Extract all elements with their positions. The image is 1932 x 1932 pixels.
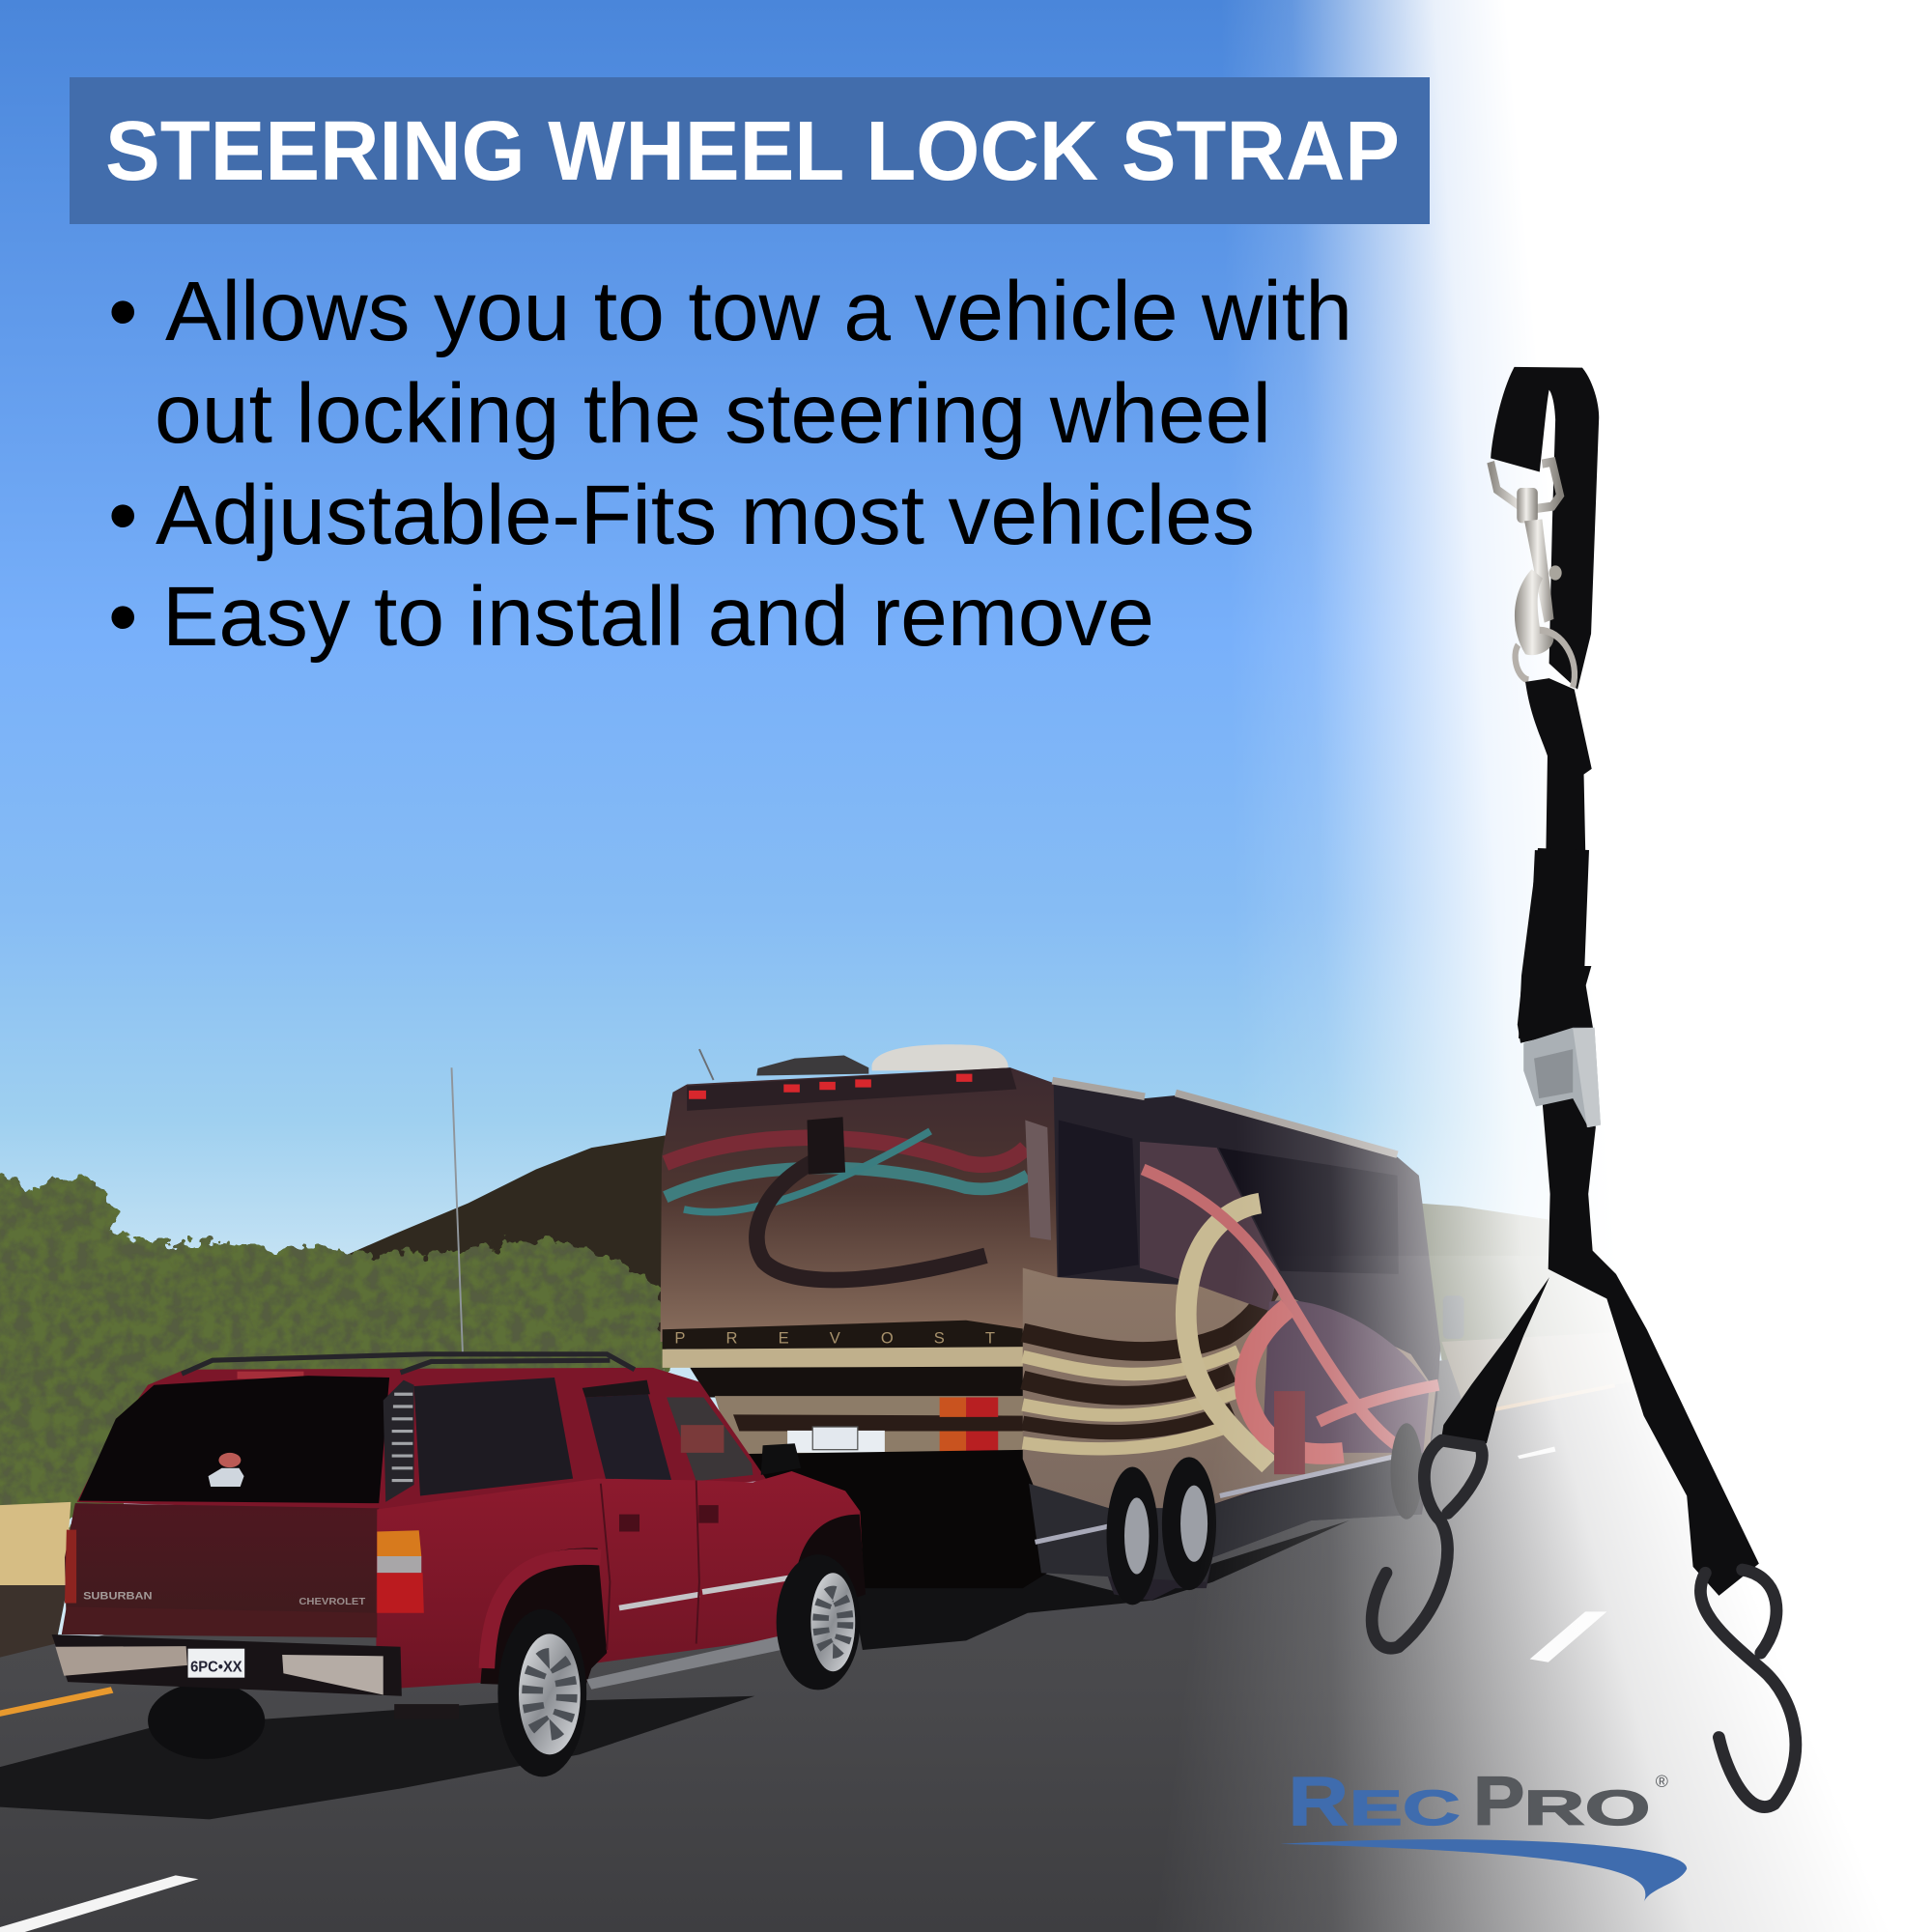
- coach antenna: [699, 1049, 714, 1080]
- bullet three: •: [108, 570, 137, 664]
- logo swoosh: [1280, 1839, 1687, 1902]
- vent slats: [392, 1394, 412, 1481]
- side swirl pink ribbon: [1143, 1169, 1438, 1446]
- white fade lower: [0, 1256, 1932, 1932]
- hatch panel: [65, 1503, 379, 1633]
- tree line: [0, 1169, 668, 1523]
- bumper: [52, 1634, 402, 1696]
- door handles: [619, 1505, 719, 1532]
- rear red lights: [966, 1397, 998, 1452]
- brand band with lettering: PREVOST: [674, 1328, 995, 1347]
- bullet one: •: [108, 265, 137, 358]
- side windows row: [1219, 1148, 1399, 1274]
- door seams: [601, 1481, 699, 1650]
- brake light: [238, 1372, 303, 1378]
- side mauve panel middle: [1140, 1142, 1278, 1311]
- product: lock strap: [1372, 367, 1796, 1807]
- rear badge SUBURBAN: SUBURBAN: [83, 1591, 153, 1603]
- top strap loop: [1491, 367, 1599, 690]
- rear rim: [519, 1634, 581, 1754]
- side body: [376, 1471, 864, 1694]
- side chrome trim: [1036, 1453, 1411, 1542]
- bullet two: •: [108, 469, 137, 562]
- side door panel: [1274, 1391, 1305, 1474]
- logo letters EC: EC: [1350, 1780, 1461, 1835]
- road marking: white dash right far: [1518, 1446, 1555, 1459]
- far rear tire: [148, 1683, 265, 1759]
- main strap with right arm: [1542, 1090, 1759, 1596]
- exhaust: [394, 1704, 459, 1719]
- RecPro logo: [1280, 1763, 1687, 1902]
- lower strap folded: [1525, 678, 1592, 856]
- road surface: [0, 1311, 1928, 1932]
- logo letter R: R: [1289, 1763, 1349, 1840]
- road marking: white dash right near: [1530, 1611, 1606, 1662]
- SUV roof and greenhouse: [77, 1368, 767, 1511]
- license plate: [188, 1649, 244, 1678]
- feature bullet list: [108, 265, 1352, 664]
- side cream waves: [1023, 1351, 1238, 1449]
- coach front wheel: [1391, 1423, 1423, 1520]
- distant hill: [345, 1135, 671, 1348]
- roof rail: [1052, 1081, 1398, 1154]
- road marking: white dash left: [0, 1875, 198, 1932]
- front tire: [777, 1554, 860, 1690]
- white fade upper: [0, 0, 1932, 1256]
- bullet one: out locking the steering wheel: [155, 367, 1271, 461]
- bumper chrome left: [55, 1646, 187, 1676]
- bumper chrome right: [282, 1655, 384, 1695]
- dark band: [690, 1367, 1028, 1397]
- SUV ground shadow: [0, 1696, 754, 1819]
- side swirl cream crescent: [1186, 1204, 1269, 1465]
- bullet one: [108, 265, 1352, 461]
- rear graphic stripes: [666, 1131, 1028, 1212]
- rear amber lights: [940, 1397, 966, 1452]
- side window first: [1059, 1120, 1139, 1277]
- plate holder: [787, 1431, 885, 1453]
- left S hook: [1372, 1440, 1482, 1648]
- side mirror: [761, 1443, 801, 1475]
- road marking: orange line left: [0, 1687, 113, 1717]
- coach license plate: [812, 1427, 858, 1450]
- wiper: [808, 1117, 845, 1175]
- side swirl pink curl: [1245, 1308, 1343, 1454]
- tail light: [377, 1530, 424, 1613]
- rear quarter window: [414, 1378, 573, 1496]
- snap latch pin: [1549, 565, 1562, 581]
- registered mark: ®: [1656, 1772, 1668, 1791]
- sleeve top: [1532, 850, 1584, 918]
- dry grass roadside: [0, 1502, 71, 1588]
- bullet two: Adjustable-Fits most vehicles: [156, 469, 1255, 562]
- antenna: [452, 1067, 463, 1354]
- rear tan panel: [715, 1396, 1028, 1456]
- tan band: [663, 1347, 1028, 1368]
- far hazy hills on right: [1417, 1204, 1651, 1360]
- roof rack: [182, 1354, 635, 1374]
- lower rear band: [62, 1606, 377, 1637]
- front rim: [810, 1573, 855, 1671]
- side tan body: [1023, 1268, 1435, 1508]
- front wheel arch: [794, 1515, 866, 1619]
- dark stripe across rear panel: [733, 1414, 1028, 1432]
- red SUV: [0, 1354, 866, 1819]
- rear tire: [497, 1609, 586, 1776]
- coach rear top band: [687, 1067, 1016, 1111]
- snap shank: [1524, 520, 1553, 623]
- rear window: [79, 1376, 389, 1503]
- left arm strap: [1441, 1277, 1549, 1443]
- right S hook: [1700, 1570, 1796, 1807]
- ring: [1516, 630, 1575, 688]
- swivel bracket: [1491, 462, 1560, 510]
- running board: [586, 1635, 787, 1690]
- rear marker lights: [689, 1074, 972, 1099]
- adjuster sleeve: [1519, 848, 1594, 1038]
- decal on rear window: [209, 1453, 244, 1487]
- gravel shoulder: [0, 1585, 68, 1660]
- side vent grille: [1025, 1120, 1051, 1240]
- side dark waves: [1023, 1280, 1275, 1396]
- window reflection: [681, 1425, 724, 1453]
- side mauve panel forward: [1263, 1300, 1430, 1453]
- coach rear wall: [661, 1067, 1060, 1342]
- coach shadow: [850, 1520, 1350, 1650]
- swivel post: [1517, 488, 1538, 523]
- right road shoulder: [1441, 1329, 1663, 1412]
- title banner: [70, 77, 1430, 224]
- logo letters RO: RO: [1523, 1780, 1651, 1835]
- photo scene: highway, SUV and motorcoach: [0, 1044, 1928, 1932]
- side vent: [384, 1380, 414, 1502]
- strap above buckle: [1518, 966, 1591, 1043]
- rear arch flare: [487, 1557, 601, 1668]
- chrome side strip: [619, 1577, 790, 1608]
- upper strap and snap hook: [1491, 367, 1599, 918]
- side lower dark wave: [1023, 1409, 1233, 1433]
- coach front mirror: [1443, 1295, 1463, 1339]
- road marking: orange line right: [1490, 1383, 1615, 1412]
- front door window: [667, 1397, 753, 1481]
- brand band with lettering: [663, 1321, 1028, 1350]
- motorcoach: [661, 1044, 1463, 1650]
- coach tandem wheel forward: [1162, 1457, 1216, 1590]
- window visor: [582, 1380, 650, 1397]
- license plate: 6PC•XX: [190, 1659, 242, 1675]
- roof vent: [756, 1055, 868, 1076]
- roof air conditioner: [871, 1044, 1009, 1070]
- rear wheel arch: [480, 1548, 607, 1687]
- left tail light: [65, 1530, 76, 1603]
- logo letter P: P: [1473, 1763, 1524, 1840]
- coach lower rear: [739, 1450, 1047, 1588]
- bullet three: Easy to install and remove: [162, 570, 1154, 664]
- coach side upper body: [1047, 1083, 1440, 1601]
- snap body: [1515, 569, 1553, 655]
- rear graphic swirl: [756, 1154, 985, 1280]
- rear badge CHEVROLET: CHEVROLET: [298, 1597, 366, 1607]
- bullet one: Allows you to tow a vehicle with: [165, 265, 1352, 358]
- cam buckle: [1523, 1028, 1601, 1127]
- coach tandem wheel rear: [1106, 1467, 1158, 1605]
- lower strap, hooks and buckle: [1372, 966, 1796, 1807]
- side lower skirt: [1029, 1453, 1423, 1582]
- rear door window: [585, 1394, 671, 1484]
- title banner: STEERING WHEEL LOCK STRAP: [105, 104, 1400, 198]
